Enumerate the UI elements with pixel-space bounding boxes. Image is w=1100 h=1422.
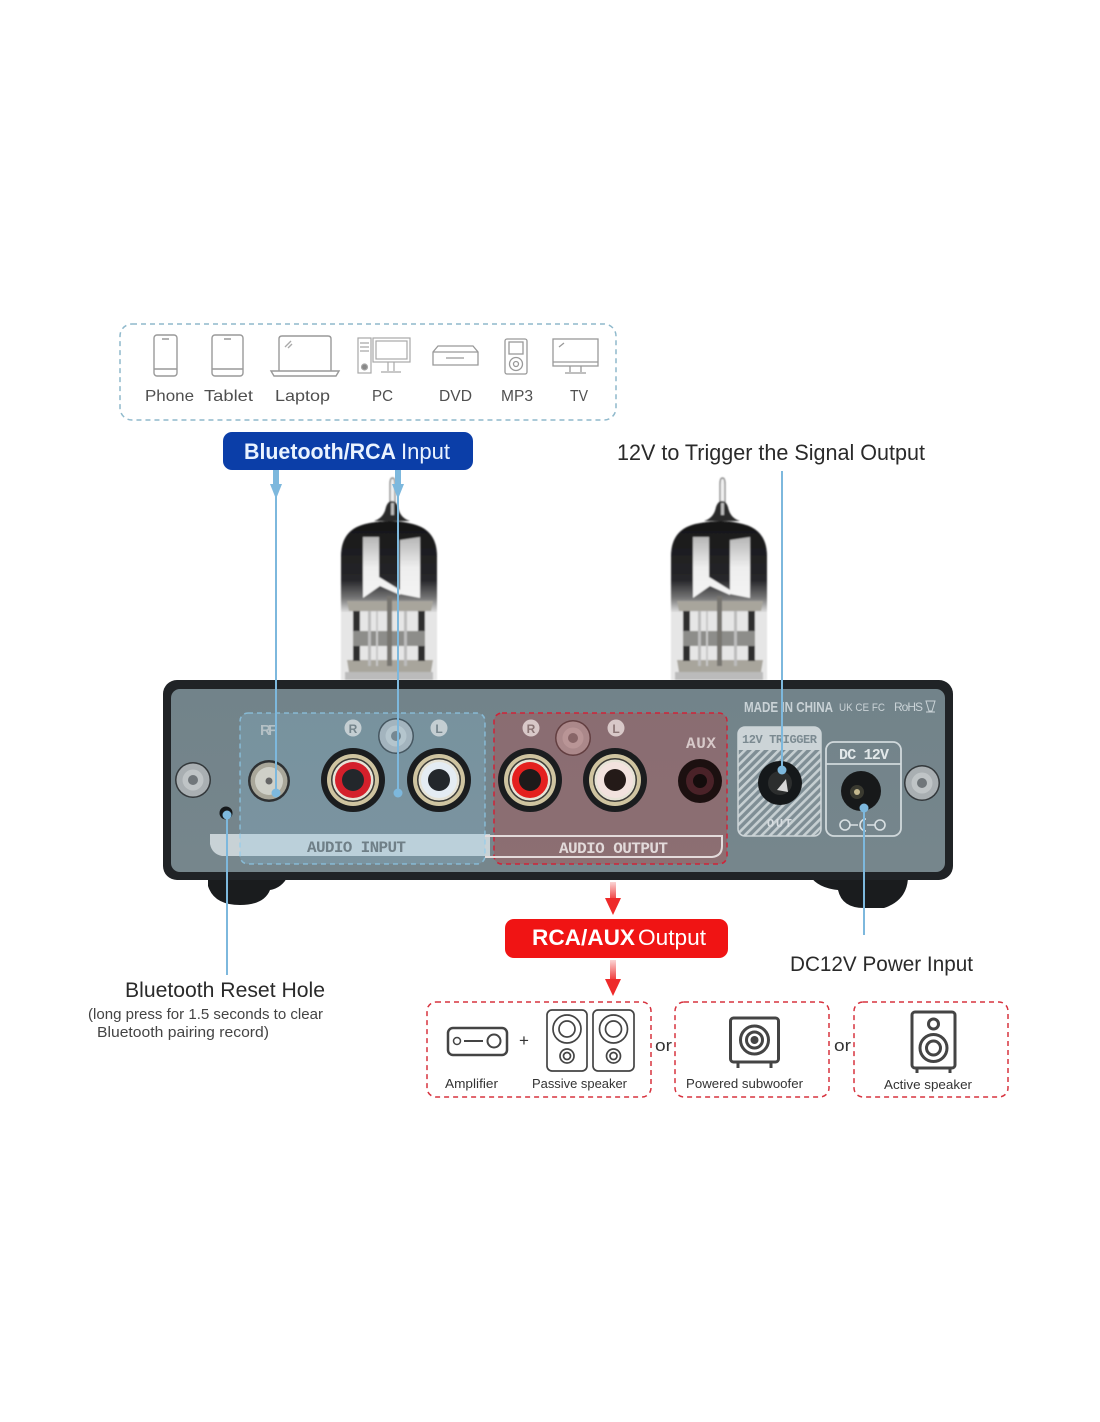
connector: 12V trigger line — [778, 471, 786, 774]
label: Bluetooth Reset Hole — [88, 979, 325, 1041]
heading: RCA/AUX Output — [505, 919, 728, 958]
label: DC12V Power Input: DC12V Power Input — [790, 953, 973, 976]
connector: DC12V line — [860, 804, 868, 935]
icon: phone — [154, 335, 177, 376]
heading: RCA/AUX Output: Output — [638, 925, 706, 950]
vacuum tube right — [671, 478, 767, 680]
RF socket — [248, 760, 290, 802]
audio input strip — [210, 834, 490, 856]
or separator: or — [834, 1036, 851, 1055]
input R marker: R — [349, 722, 358, 736]
device labels: Laptop — [275, 388, 330, 405]
red output highlight — [494, 713, 727, 864]
heading: Bluetooth/RCA Input — [223, 432, 473, 470]
device labels: PC — [372, 388, 393, 405]
amplifier rubber feet — [208, 876, 908, 908]
heading: 12V trigger: 12V to Trigger the Signal Output — [617, 440, 925, 465]
plus sign: + — [519, 1031, 529, 1050]
heading: Bluetooth/RCA Input: Bluetooth/RCA — [244, 439, 396, 464]
input L socket — [407, 748, 471, 812]
or separator: or — [655, 1036, 672, 1055]
amplifier caption: Amplifier — [445, 1076, 499, 1091]
panel: amplifier and passive speakers — [427, 1002, 651, 1097]
icon: passive speaker left — [547, 1010, 587, 1071]
device labels: TV — [570, 388, 588, 405]
icon: DVD — [433, 346, 478, 365]
device labels: Tablet — [204, 388, 254, 405]
icon: tablet — [212, 335, 243, 376]
output strip outline — [485, 836, 722, 857]
heading: RCA/AUX Output: RCA/AUX — [532, 925, 635, 950]
compliance marks: MADE IN CHINA — [744, 699, 833, 716]
compliance marks: RoHS — [894, 700, 923, 714]
panel border — [854, 1002, 1008, 1097]
input L marker — [430, 720, 448, 736]
arrow: input to RF socket — [270, 470, 282, 798]
passive speaker caption: Passive speaker — [532, 1076, 628, 1091]
active speaker caption: Active speaker — [884, 1077, 973, 1092]
compliance marks — [744, 699, 935, 716]
DC 12V block — [826, 742, 901, 836]
output R socket — [498, 748, 562, 812]
subwoofer caption: Powered subwoofer — [686, 1076, 804, 1091]
output L marker: L — [612, 722, 620, 736]
icon: TV — [553, 339, 598, 373]
label: Bluetooth Reset Hole: Bluetooth Reset Hole — [125, 979, 325, 1002]
input R socket — [321, 748, 385, 812]
chassis body — [163, 680, 953, 880]
panel: powered subwoofer — [675, 1002, 829, 1097]
arrow: input to RCA sockets — [392, 470, 404, 798]
icon: subwoofer — [730, 1018, 778, 1068]
arrow: output down to pill — [605, 882, 621, 915]
AUX label: AUX — [686, 735, 716, 753]
icon: MP3 player — [505, 339, 527, 374]
chassis left screw — [175, 762, 211, 798]
panel border — [427, 1002, 651, 1097]
arrow: pill to outputs — [605, 960, 621, 996]
chassis right screw — [904, 765, 940, 801]
device labels — [145, 388, 588, 405]
output R marker — [522, 720, 540, 736]
device panel border — [120, 324, 616, 420]
output R marker: R — [527, 722, 536, 736]
connector: reset hole line — [222, 810, 232, 975]
12V trigger block: 12V TRIGGER — [742, 733, 818, 747]
icon: passive speaker right — [593, 1010, 634, 1071]
DC 12V block: DC 12V — [839, 747, 889, 764]
audio output label: AUDIO OUTPUT — [559, 840, 668, 858]
input screw — [378, 718, 414, 754]
compliance marks: UK CE FC — [839, 702, 885, 714]
AUX socket — [678, 759, 722, 803]
icon: amplifier — [448, 1028, 507, 1055]
panel: active speaker — [854, 1002, 1008, 1097]
heading: Bluetooth/RCA Input: Input — [401, 439, 450, 464]
12V trigger block — [738, 727, 821, 836]
output screw — [555, 720, 591, 756]
output L socket — [583, 748, 647, 812]
RF label: RF — [260, 722, 277, 739]
label: Bluetooth Reset Hole: Bluetooth pairing record) — [97, 1024, 269, 1041]
audio input label: AUDIO INPUT — [307, 839, 406, 857]
icon: active speaker — [912, 1012, 955, 1073]
icon: laptop — [271, 336, 339, 376]
icon: PC — [358, 338, 410, 373]
vacuum tube left — [341, 478, 437, 680]
blue input highlight — [240, 713, 485, 864]
reset hole — [220, 806, 232, 820]
12V trigger block: OUT — [767, 817, 792, 831]
device labels: MP3 — [501, 388, 533, 405]
panel border — [675, 1002, 829, 1097]
device labels: Phone — [145, 388, 194, 405]
device labels: DVD — [439, 388, 472, 405]
panel: compatible source devices — [120, 324, 616, 420]
chassis face plate — [171, 689, 945, 872]
input R marker — [344, 720, 362, 736]
panel: amplifier rear chassis — [163, 680, 953, 880]
output L marker — [608, 720, 624, 736]
input L marker: L — [435, 722, 443, 736]
label: Bluetooth Reset Hole: (long press for 1.5 seconds to clear — [88, 1006, 323, 1023]
